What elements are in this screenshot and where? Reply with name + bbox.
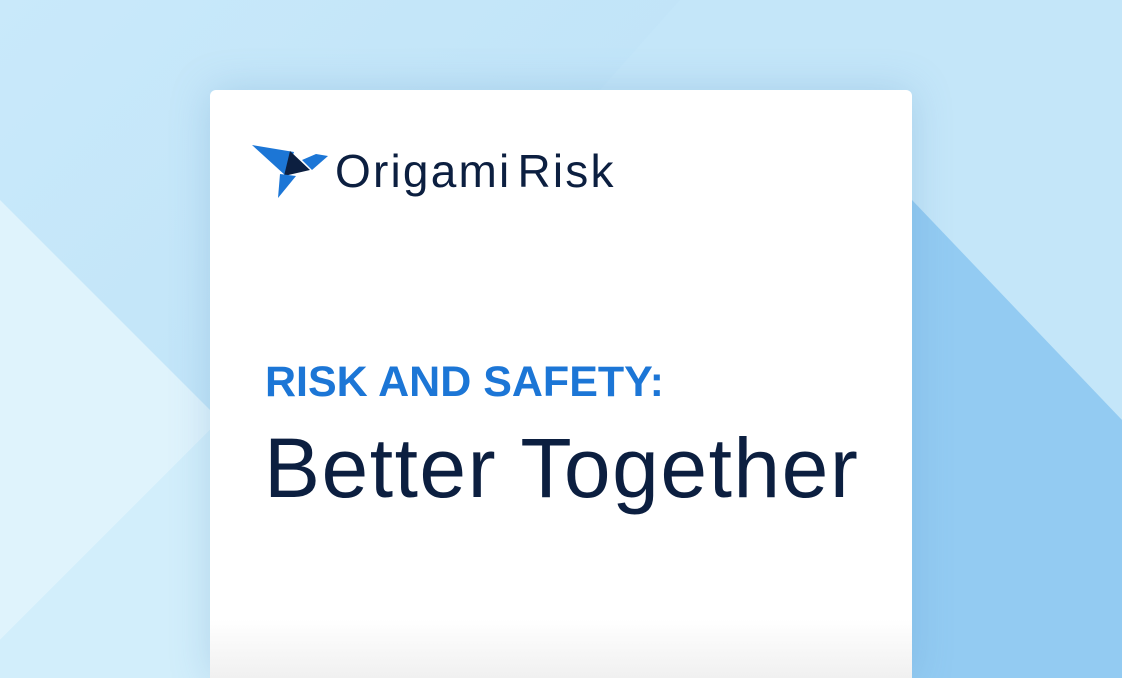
title: Better Together	[264, 421, 859, 515]
logo text: OrigamiRisk	[335, 145, 616, 197]
card	[210, 90, 912, 678]
logo	[252, 145, 616, 198]
subtitle: RISK AND SAFETY:	[265, 358, 664, 406]
icon: origami bird	[252, 145, 328, 198]
